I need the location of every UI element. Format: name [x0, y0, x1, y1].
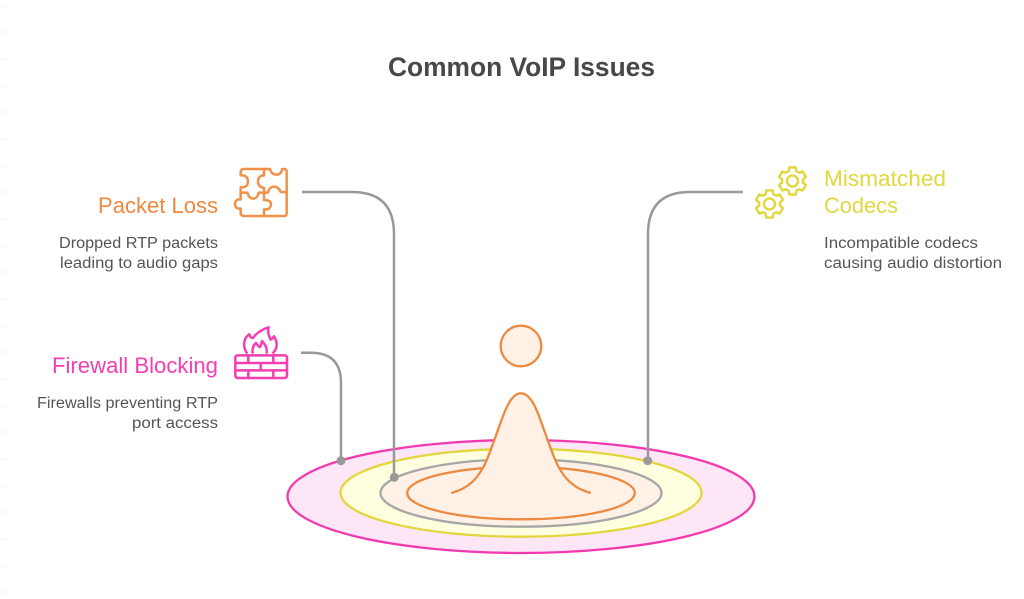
panel: mismatched codecs: [756, 166, 1002, 272]
chart: concentric ripple rings: [288, 326, 754, 553]
panel: firewall blocking: [37, 327, 287, 432]
connector end dots: [336, 456, 652, 482]
icon: puzzle: [235, 169, 287, 216]
text: packet loss description: [59, 235, 218, 272]
arrow: firewall connector: [301, 353, 341, 461]
ring: core: [407, 467, 635, 519]
text: firewall blocking description: port access: [132, 415, 218, 432]
text: firewall blocking description: Firewalls preventing RTP: [37, 395, 218, 412]
ring: packet loss: [380, 459, 662, 527]
droplet: bell shape: [452, 393, 590, 493]
icon: firewall: [235, 327, 287, 378]
ring: firewall blocking: [288, 440, 754, 553]
title: Common VoIP Issues: [388, 52, 655, 82]
heading: firewall blocking: Firewall Blocking: [52, 353, 218, 378]
droplet: circle: [501, 326, 541, 366]
arrow: codecs connector: [648, 192, 743, 461]
heading: packet loss: Packet Loss: [98, 193, 218, 218]
ring: mismatched codecs: [340, 449, 702, 537]
heading: mismatched codecs: Mismatched: [824, 166, 946, 191]
text: firewall blocking description: [37, 395, 218, 432]
text: packet loss description: leading to audio gaps: [60, 255, 218, 272]
text: packet loss description: Dropped RTP packets: [59, 235, 218, 252]
heading: mismatched codecs: Codecs: [824, 193, 898, 218]
text: mismatched codecs description: causing audio distortion: [824, 255, 1002, 272]
text: mismatched codecs description: [824, 235, 1002, 272]
heading: mismatched codecs: [824, 166, 946, 218]
connectors: [301, 192, 743, 477]
icon: gears: [756, 167, 806, 218]
arrow: packet loss connector: [302, 192, 394, 477]
text: mismatched codecs description: Incompatible codecs: [824, 235, 978, 252]
panel: packet loss: [59, 169, 287, 272]
